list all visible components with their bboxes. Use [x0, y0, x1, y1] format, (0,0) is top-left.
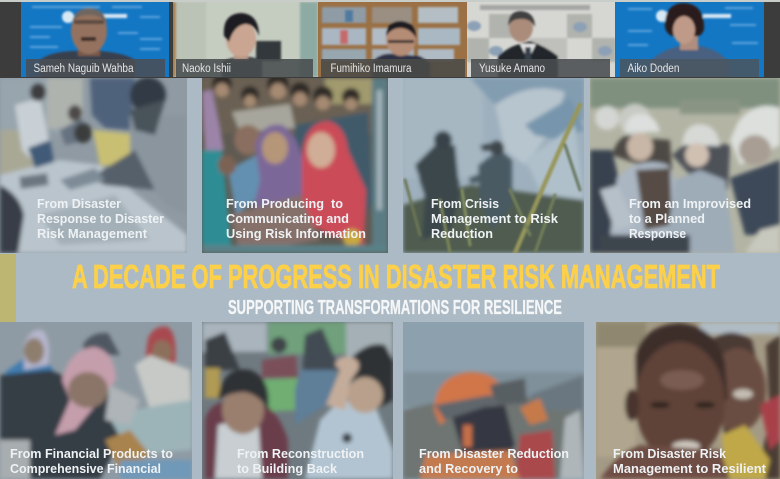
name label: [176, 59, 313, 77]
video tile: Yusuke Amano: [467, 2, 616, 78]
name label: Fumihiko Imamura: [330, 63, 412, 75]
video tile: Aiko Doden: [615, 2, 764, 78]
name label: Yusuke Amano: [479, 63, 545, 75]
caption: Communicating and: [226, 212, 349, 226]
name label: [620, 59, 759, 77]
name label: [471, 59, 610, 77]
panel: From Reconstruction to Building Back: [202, 322, 393, 479]
name label: Naoko Ishii: [182, 63, 231, 75]
caption: From an Improvised: [629, 197, 751, 211]
panel: From an Improvised to a Planned Response: [590, 78, 780, 253]
panel: From Disaster Risk Management to Resilient: [596, 322, 780, 479]
caption: From Producing to: [226, 197, 343, 211]
caption: From Disaster Risk: [613, 447, 726, 461]
subtitle: SUPPORTING TRANSFORMATIONS FOR RESILIENCE: [228, 297, 562, 319]
panel: From Crisis Management to Risk Reduction: [403, 78, 584, 253]
video tile: Fumihiko Imamura: [318, 2, 467, 78]
name label: [321, 59, 465, 77]
caption: From Crisis: [431, 197, 499, 211]
caption: Response to Disaster: [37, 212, 164, 226]
video tile: Sameh Naguib Wahba: [21, 2, 169, 78]
caption: Management to Risk: [431, 212, 558, 226]
caption: and Recovery to: [419, 462, 518, 476]
panel: From Disaster Reduction and Recovery to: [403, 322, 584, 479]
caption: Response: [629, 227, 686, 241]
name label: Sameh Naguib Wahba: [34, 63, 134, 75]
name label: Aiko Doden: [628, 63, 680, 75]
caption: Using Risk Information: [226, 227, 366, 241]
panel: From Producing to Communicating and Using Risk Information: [202, 73, 388, 253]
caption: Management to Resilient: [613, 462, 767, 476]
caption: From Disaster: [37, 197, 121, 211]
video call strip: [0, 0, 780, 78]
caption: From Financial Products to: [10, 447, 173, 461]
panel: From Disaster Response to Disaster Risk Management: [0, 77, 187, 253]
accent bar: [0, 254, 16, 322]
caption: Comprehensive Financial: [10, 462, 161, 476]
panel: From Financial Products to Comprehensive Financial: [0, 322, 192, 479]
caption: From Reconstruction: [237, 447, 364, 461]
caption: From Disaster Reduction: [419, 447, 569, 461]
caption: to a Planned: [629, 212, 705, 226]
caption: to Building Back: [237, 462, 337, 476]
caption: Risk Management: [37, 227, 148, 241]
caption: Reduction: [431, 227, 493, 241]
video tile: Naoko Ishii: [170, 2, 318, 78]
name label: [26, 59, 165, 77]
